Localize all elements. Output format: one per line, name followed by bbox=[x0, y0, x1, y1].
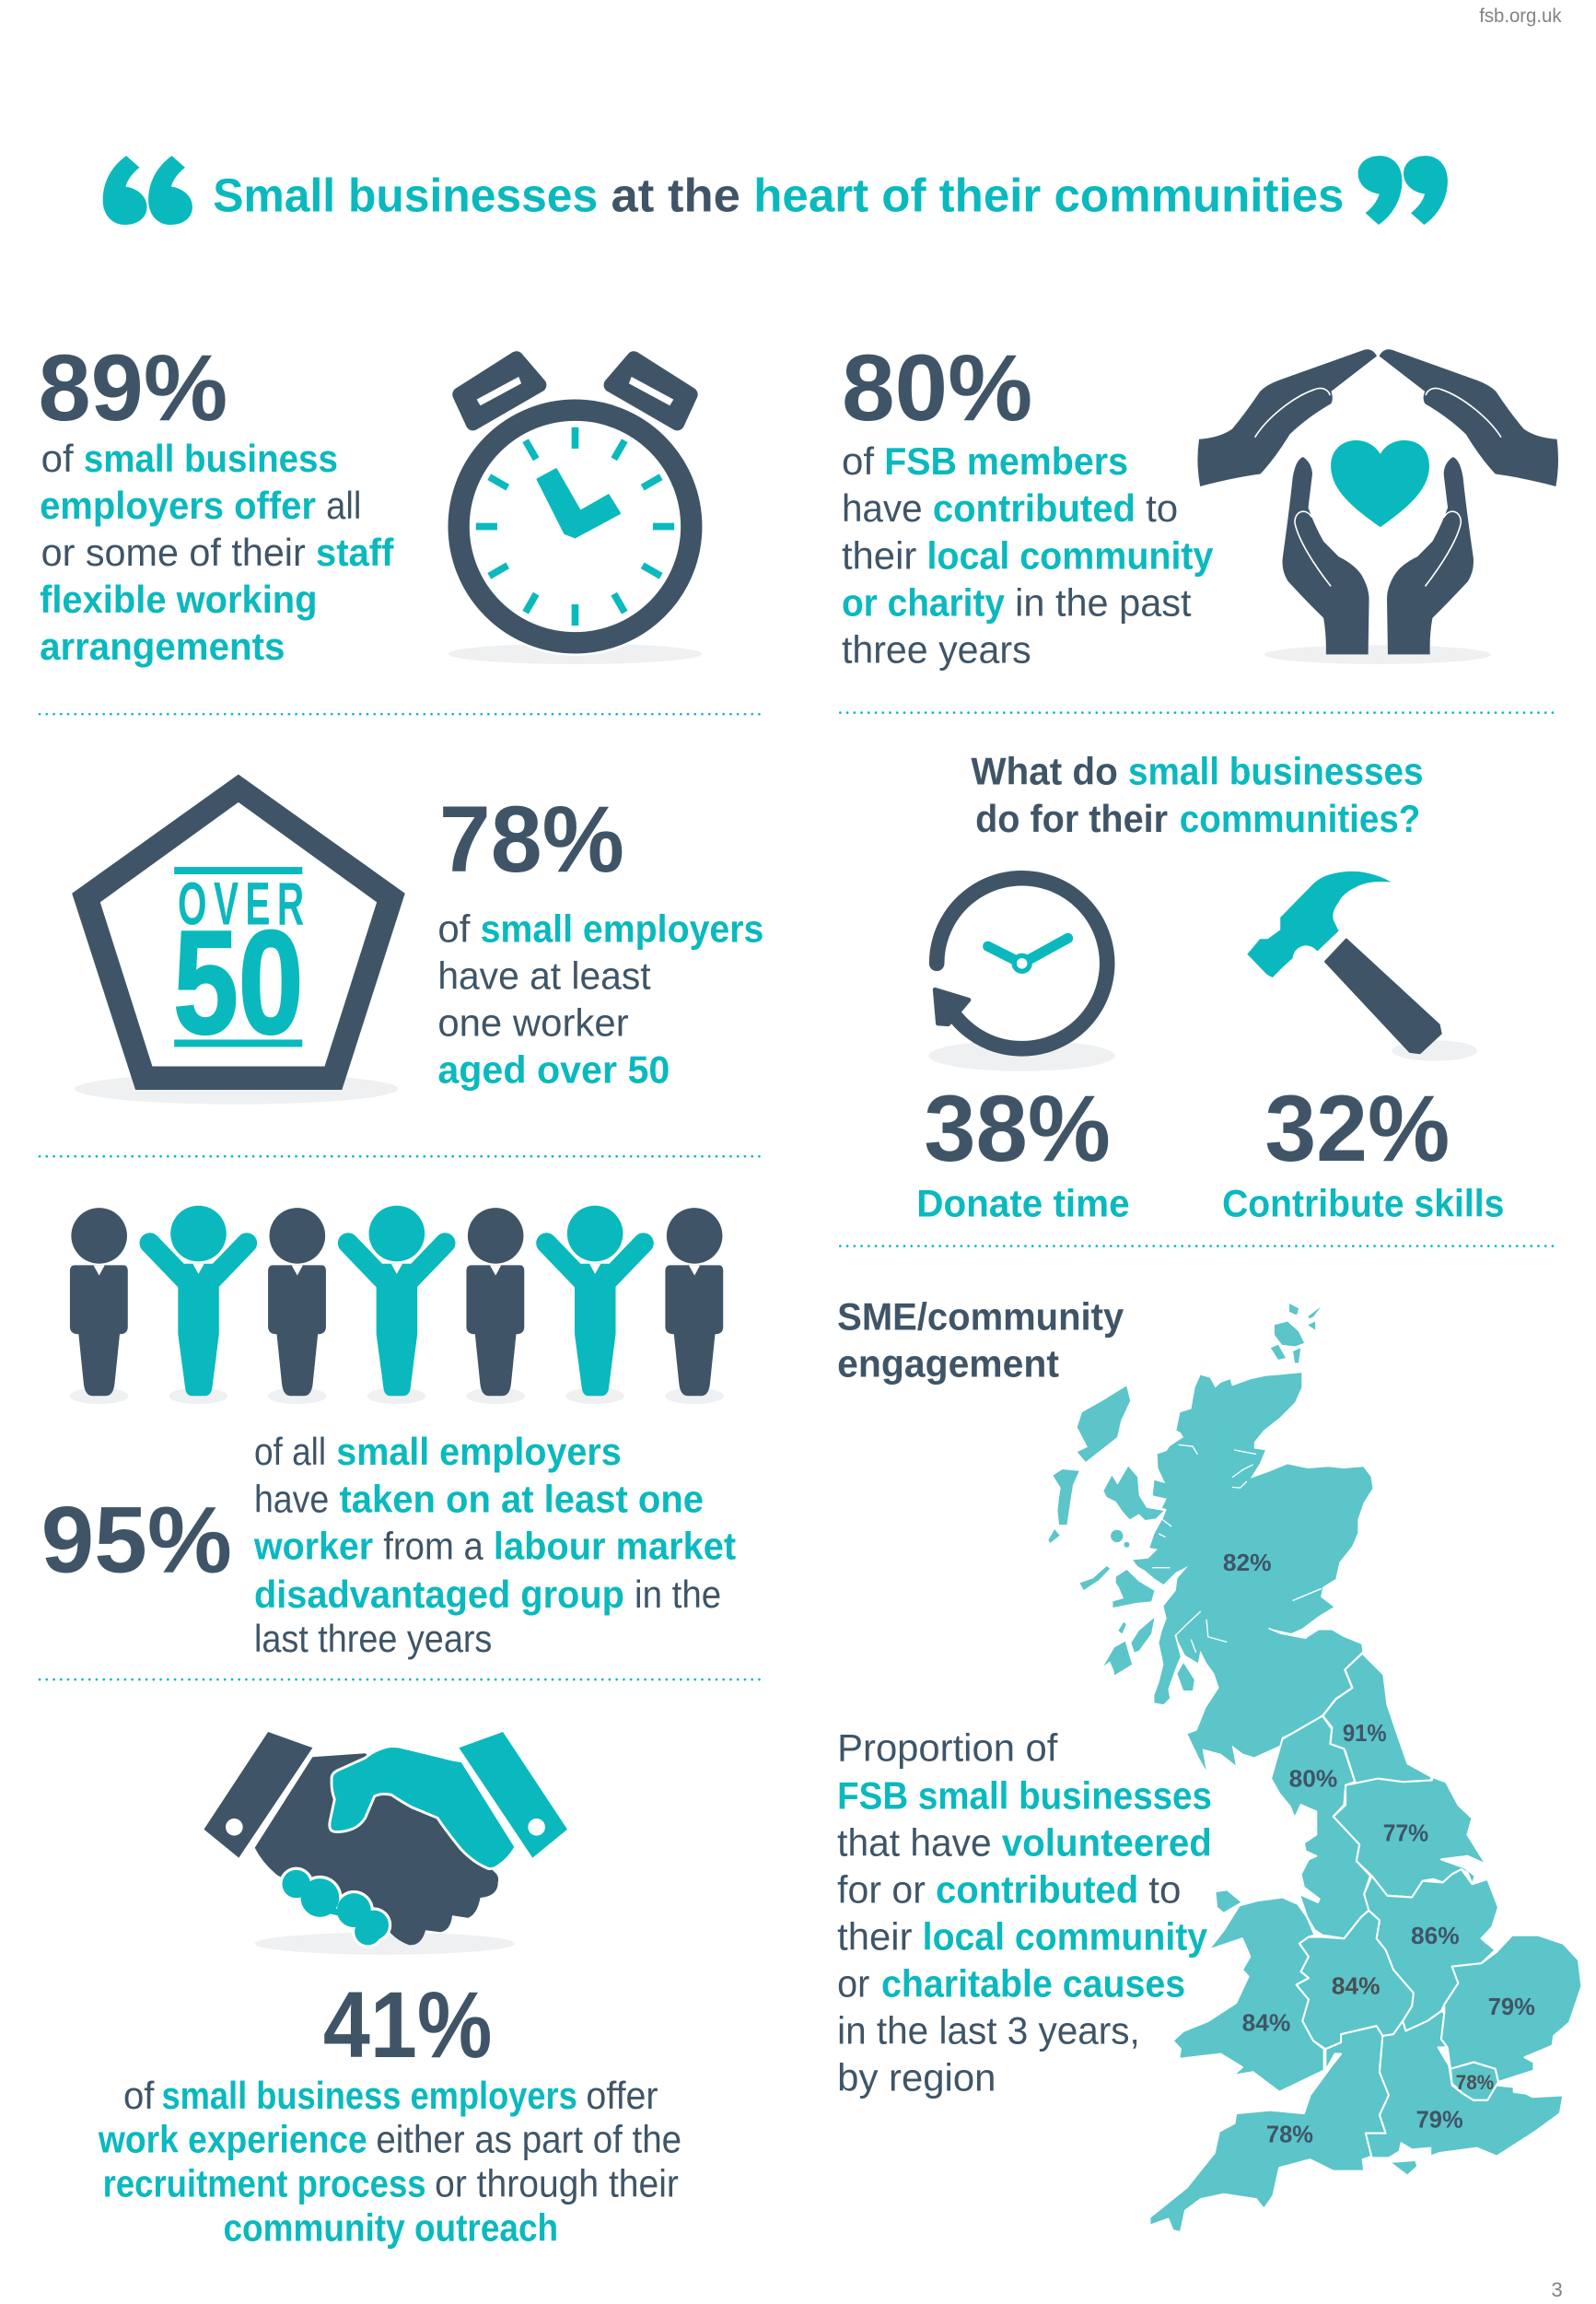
text: flexible working description: flexible working bbox=[40, 578, 318, 621]
region: South East England bbox=[1366, 2011, 1563, 2158]
panel: 41% work experience bbox=[98, 1732, 682, 2249]
icon: closing quote marks bbox=[1358, 156, 1448, 225]
panel: 95% disadvantaged workers bbox=[41, 1206, 736, 1660]
text: work experience description: community outreach bbox=[223, 2205, 558, 2249]
text: work experience description: either as part of the bbox=[376, 2118, 682, 2161]
region: Yorkshire bbox=[1334, 1777, 1486, 1898]
stat: 32%: 32% bbox=[1264, 1076, 1450, 1181]
person 4 bbox=[348, 1206, 445, 1396]
text: community contribution description bbox=[842, 439, 1213, 671]
text: map description: to bbox=[1148, 1868, 1181, 1912]
map labels: 91% bbox=[1343, 1721, 1387, 1747]
icon: handshake bbox=[204, 1732, 567, 1955]
map labels: 79% bbox=[1488, 1994, 1535, 2020]
label: donate time: Donate time bbox=[916, 1182, 1130, 1225]
map labels: 78% bbox=[1456, 2071, 1494, 2094]
panel: 78% over 50 bbox=[72, 775, 763, 1105]
text: map description: FSB small businesses bbox=[837, 1773, 1212, 1817]
text: community contribution description: three years bbox=[842, 627, 1031, 671]
heading: question: What do bbox=[971, 750, 1118, 793]
region: East of England bbox=[1441, 1936, 1581, 2082]
heading text bbox=[213, 170, 1344, 222]
text: map description: for or bbox=[837, 1868, 926, 1912]
text: disadvantaged group description bbox=[253, 1430, 736, 1660]
person 7 bbox=[665, 1208, 723, 1396]
text: community contribution description: of bbox=[842, 439, 875, 483]
text: map description: charitable causes bbox=[881, 1962, 1185, 2006]
text: over 50 description: one worker bbox=[437, 1000, 629, 1044]
map labels: 84% bbox=[1332, 1973, 1380, 1999]
text: community contribution description: their bbox=[842, 533, 916, 577]
region: Scotland west coast and Hebrides bbox=[1048, 1428, 1262, 1723]
icon: alarm clock bbox=[446, 358, 705, 664]
text: community contribution description: or charity bbox=[842, 580, 1005, 624]
heading text: heart of their communities bbox=[753, 170, 1344, 222]
text: map description: volunteered bbox=[1002, 1821, 1212, 1865]
icon: hands sheltering heart bbox=[1197, 349, 1558, 664]
region: London bbox=[1450, 2063, 1498, 2100]
text: disadvantaged group description: last three years bbox=[254, 1617, 492, 1660]
text: map description bbox=[837, 1726, 1212, 2099]
map labels: 77% bbox=[1383, 1821, 1428, 1847]
text: work experience description bbox=[98, 2074, 682, 2249]
text: disadvantaged group description: small employers bbox=[336, 1430, 622, 1473]
text: map description: by region bbox=[837, 2056, 996, 2099]
chart: UK regional map bbox=[1048, 1304, 1581, 2232]
heading: question: do for their bbox=[975, 797, 1168, 840]
text: disadvantaged group description: of all bbox=[254, 1430, 326, 1473]
stat: 95%: 95% bbox=[41, 1488, 232, 1593]
icon: over 50 pentagon: OVER bbox=[178, 870, 311, 938]
text: community contribution description: have bbox=[842, 486, 923, 530]
icon: row of seven people bbox=[70, 1206, 724, 1404]
stat: 78%: 78% bbox=[439, 787, 624, 892]
heading: question bbox=[971, 750, 1424, 840]
text: flexible working description: or some of their bbox=[41, 531, 306, 574]
region: Scotland mainland north and east with northern isles bbox=[1078, 1304, 1372, 1771]
icon: clock with return arrow bbox=[928, 878, 1115, 1071]
text: disadvantaged group description: in the bbox=[635, 1573, 721, 1616]
heading: question: small businesses bbox=[1128, 750, 1424, 793]
text: disadvantaged group description: worker bbox=[253, 1524, 373, 1567]
region: North East England bbox=[1322, 1654, 1432, 1785]
region: North West England bbox=[1271, 1716, 1370, 1938]
person 6 bbox=[546, 1206, 644, 1396]
text: disadvantaged group description: from a bbox=[383, 1524, 484, 1567]
text: flexible working description bbox=[40, 437, 394, 668]
label: contribute skills: Contribute skills bbox=[1222, 1182, 1504, 1225]
text: work experience description: offer bbox=[586, 2074, 658, 2117]
text: work experience description: recruitment process bbox=[103, 2162, 426, 2205]
text: disadvantaged group description: have bbox=[254, 1477, 329, 1520]
text: over 50 description: of bbox=[437, 906, 471, 950]
text: community contribution description: contributed bbox=[933, 486, 1136, 530]
text: work experience description: of bbox=[123, 2074, 155, 2117]
text: work experience description: work experience bbox=[98, 2118, 367, 2161]
map labels bbox=[1223, 1550, 1535, 2148]
text: community contribution description: FSB members bbox=[884, 439, 1128, 483]
person 2 bbox=[150, 1206, 247, 1396]
icon: over 50 pentagon: 50 bbox=[173, 900, 303, 1064]
map labels: 80% bbox=[1289, 1767, 1338, 1793]
person 1 bbox=[70, 1208, 128, 1396]
person 3 bbox=[268, 1208, 326, 1396]
heading: SME/community engagement: SME/community bbox=[837, 1294, 1124, 1338]
text: map description: or bbox=[837, 1962, 869, 2006]
panel: what do small businesses do bbox=[916, 750, 1504, 1225]
region: East Midlands bbox=[1364, 1869, 1498, 2031]
panel: 89% flexible working bbox=[38, 335, 705, 668]
map labels: 86% bbox=[1411, 1924, 1460, 1949]
text: flexible working description: small business bbox=[84, 437, 338, 480]
panel: SME community engagement map bbox=[837, 1294, 1581, 2232]
heading: question: communities? bbox=[1180, 797, 1420, 840]
icon: hammer bbox=[1247, 871, 1477, 1061]
text: disadvantaged group description: disadvantaged group bbox=[254, 1573, 624, 1616]
text: disadvantaged group description: taken on at least one bbox=[339, 1477, 704, 1520]
stat: 41%: 41% bbox=[323, 1972, 492, 2077]
region: Wales bbox=[1173, 1898, 1324, 2092]
text: map description: Proportion of bbox=[837, 1726, 1058, 1770]
region: West Midlands bbox=[1297, 1911, 1414, 2049]
region: England and Wales bbox=[1149, 1716, 1581, 2232]
text: map description: in the last 3 years, bbox=[837, 2009, 1140, 2053]
text: flexible working description: arrangements bbox=[40, 625, 285, 668]
text: map description: contributed bbox=[936, 1868, 1138, 1912]
text: map description: local community bbox=[923, 1915, 1207, 1959]
heading: SME/community engagement: engagement bbox=[837, 1342, 1059, 1386]
text: community contribution description: to bbox=[1146, 486, 1178, 530]
text: over 50 description: aged over 50 bbox=[437, 1048, 670, 1092]
text: community contribution description: in the past bbox=[1015, 580, 1192, 624]
text: over 50 description: small employers bbox=[481, 906, 763, 950]
text: work experience description: or through their bbox=[435, 2162, 679, 2205]
map labels: 82% bbox=[1223, 1550, 1272, 1576]
text: over 50 description bbox=[437, 906, 763, 1092]
heading: SME/community engagement bbox=[837, 1294, 1124, 1386]
stat: 38%: 38% bbox=[924, 1076, 1111, 1181]
heading text: Small businesses bbox=[213, 170, 598, 222]
text: flexible working description: of bbox=[41, 437, 74, 480]
region: South West England bbox=[1149, 2026, 1389, 2232]
text: flexible working description: all bbox=[326, 484, 361, 527]
text: community contribution description: local community bbox=[926, 533, 1213, 577]
panel: 80% community contribution bbox=[842, 335, 1558, 671]
page number: 3 bbox=[1551, 2278, 1563, 2301]
stat: 80%: 80% bbox=[842, 335, 1032, 440]
stat: 89%: 89% bbox=[38, 335, 227, 440]
icon: over 50 pentagon bbox=[72, 775, 405, 1105]
heading text: at the bbox=[612, 170, 740, 222]
title bbox=[103, 156, 1448, 225]
icon: opening quote marks bbox=[103, 156, 192, 225]
text: flexible working description: employers offer bbox=[40, 484, 316, 527]
person 5 bbox=[466, 1208, 524, 1396]
text: over 50 description: have at least bbox=[437, 953, 651, 997]
text: flexible working description: staff bbox=[316, 531, 394, 574]
map labels: 79% bbox=[1416, 2108, 1463, 2134]
text: map description: that have bbox=[837, 1821, 992, 1865]
text: map description: their bbox=[837, 1915, 913, 1959]
text: work experience description: small business employers bbox=[161, 2074, 577, 2117]
map labels: 84% bbox=[1242, 2010, 1291, 2036]
text: disadvantaged group description: labour market bbox=[494, 1524, 736, 1567]
map labels: 78% bbox=[1266, 2123, 1313, 2148]
source url: fsb.org.uk bbox=[1479, 5, 1562, 27]
